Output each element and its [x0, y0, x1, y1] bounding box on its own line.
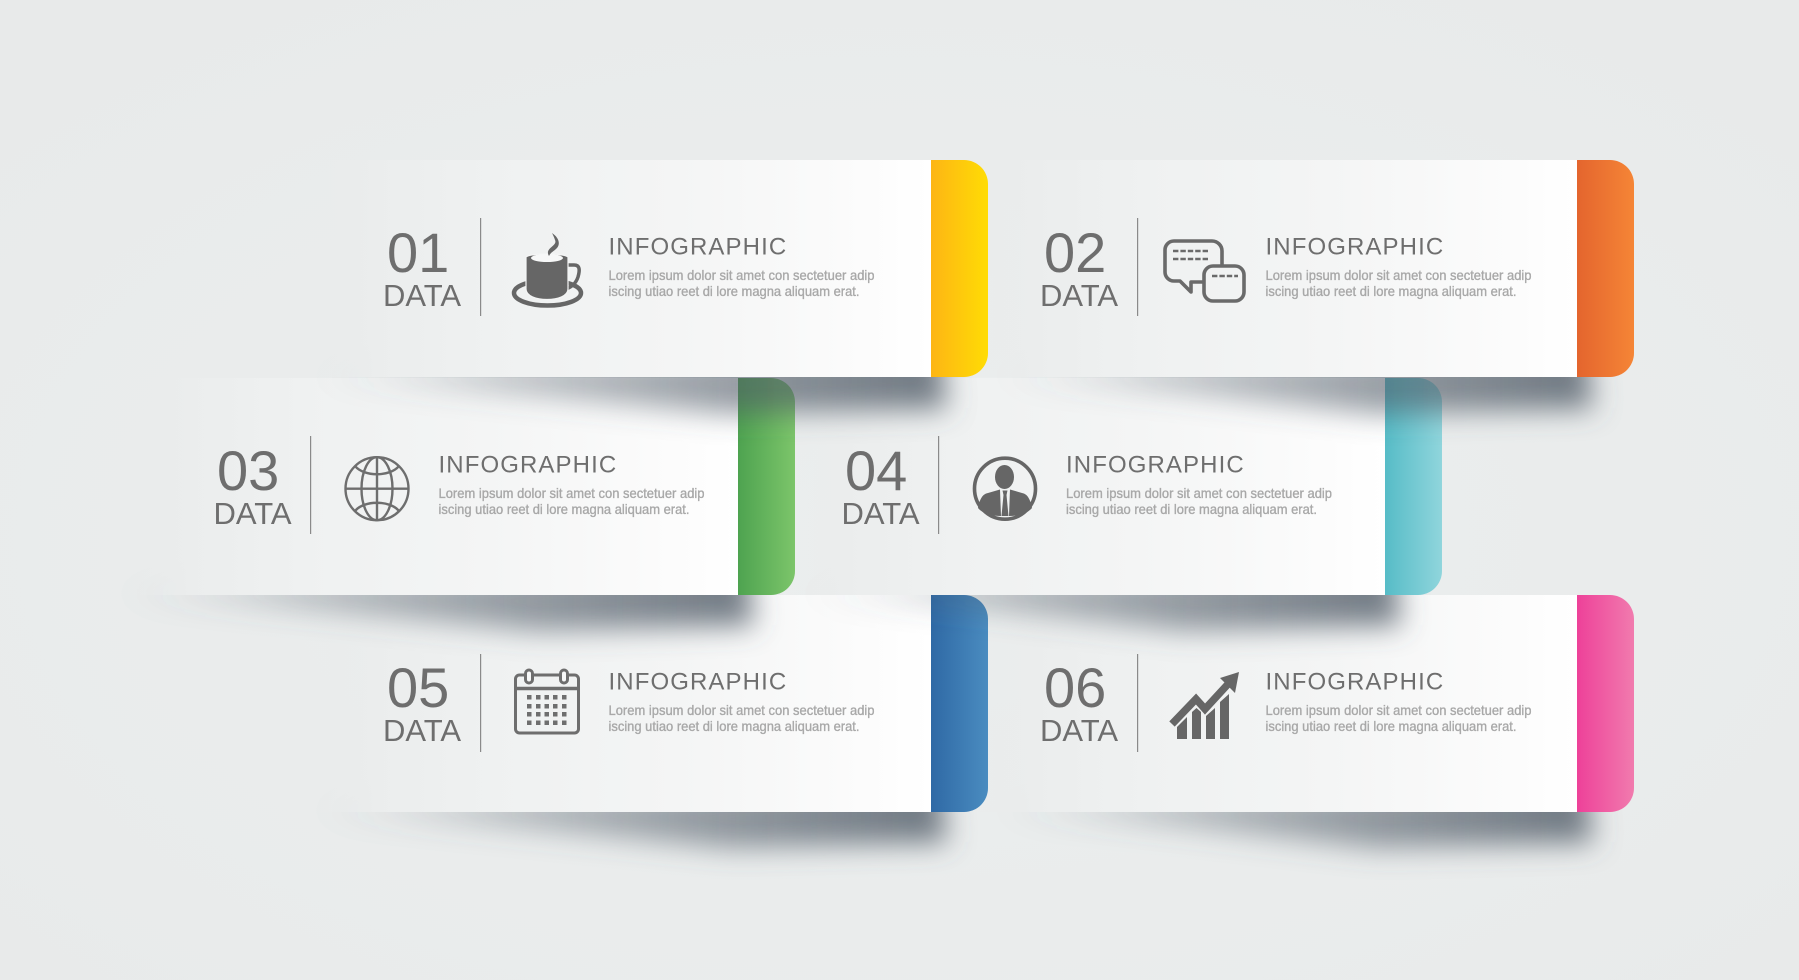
body text: Lorem ipsum dolor sit amet con sectetuer adip [438, 485, 705, 501]
panel: 04 card [770, 378, 1442, 595]
icon: growth chart [1172, 672, 1239, 739]
number 04: 04 [845, 439, 907, 502]
icon: calendar [516, 670, 578, 733]
body text [1266, 267, 1532, 299]
panel 03 green tab [738, 378, 795, 595]
content: 01 [383, 218, 875, 316]
body text [1266, 702, 1532, 734]
body text [438, 485, 705, 517]
panel 06 pink tab [1577, 595, 1634, 812]
label DATA: DATA [383, 713, 461, 748]
panel 01 yellow tab [931, 160, 988, 377]
body text: iscing utiao reet di lore magna aliquam erat. [608, 718, 860, 734]
heading: INFOGRAPHIC [1266, 668, 1444, 696]
heading: INFOGRAPHIC [608, 234, 787, 260]
panel: 06 card [960, 595, 1634, 812]
body text: iscing utiao reet di lore magna aliquam erat. [1266, 283, 1516, 299]
panel: 05 card [300, 595, 988, 812]
panel: 03 card [115, 378, 795, 595]
heading: INFOGRAPHIC [1266, 234, 1444, 260]
panel 04 white body [770, 378, 1385, 595]
body text: iscing utiao reet di lore magna aliquam erat. [438, 501, 690, 517]
number 03: 03 [217, 439, 279, 502]
label DATA: DATA [842, 496, 920, 531]
body text: Lorem ipsum dolor sit amet con sectetuer adip [1266, 267, 1532, 283]
body text: iscing utiao reet di lore magna aliquam erat. [1266, 718, 1516, 734]
body text [608, 702, 875, 734]
body text: iscing utiao reet di lore magna aliquam erat. [1066, 501, 1317, 517]
label DATA: DATA [1040, 278, 1118, 313]
body text: Lorem ipsum dolor sit amet con sectetuer adip [608, 267, 875, 283]
content: 05 [383, 654, 875, 752]
icon: businessman [974, 458, 1036, 519]
number 01: 01 [387, 221, 449, 284]
panel 04 teal tab [1385, 378, 1442, 595]
body text: Lorem ipsum dolor sit amet con sectetuer adip [1266, 702, 1532, 718]
content: 04 [842, 436, 1332, 534]
body text: iscing utiao reet di lore magna aliquam erat. [608, 283, 860, 299]
content: 03 [214, 436, 705, 534]
panel 06 white body [960, 595, 1577, 812]
content: 02 [1040, 218, 1532, 316]
number 02: 02 [1044, 221, 1106, 284]
number 06: 06 [1044, 656, 1106, 719]
icon: coffee cup [514, 233, 581, 306]
panel 01 white body [300, 160, 931, 377]
panel: 02 card [960, 160, 1634, 377]
heading: INFOGRAPHIC [1066, 452, 1245, 478]
icon: globe [346, 457, 408, 520]
label DATA: DATA [1040, 713, 1118, 748]
label DATA: DATA [383, 278, 461, 313]
label DATA: DATA [214, 496, 292, 531]
heading: INFOGRAPHIC [608, 668, 787, 696]
body text [608, 267, 875, 299]
heading: INFOGRAPHIC [438, 452, 617, 478]
panel: 01 card [300, 160, 988, 377]
panel 02 orange tab [1577, 160, 1634, 377]
number 05: 05 [387, 656, 449, 719]
panel 03 white body [115, 378, 738, 595]
panel 05 white body [300, 595, 931, 812]
content: 06 [1040, 654, 1532, 752]
panel 02 white body [960, 160, 1577, 377]
icon: chat bubbles [1165, 241, 1244, 301]
panel 05 blue tab [931, 595, 988, 812]
body text: Lorem ipsum dolor sit amet con sectetuer adip [608, 702, 875, 718]
body text: Lorem ipsum dolor sit amet con sectetuer adip [1066, 485, 1332, 501]
body text [1066, 485, 1332, 517]
